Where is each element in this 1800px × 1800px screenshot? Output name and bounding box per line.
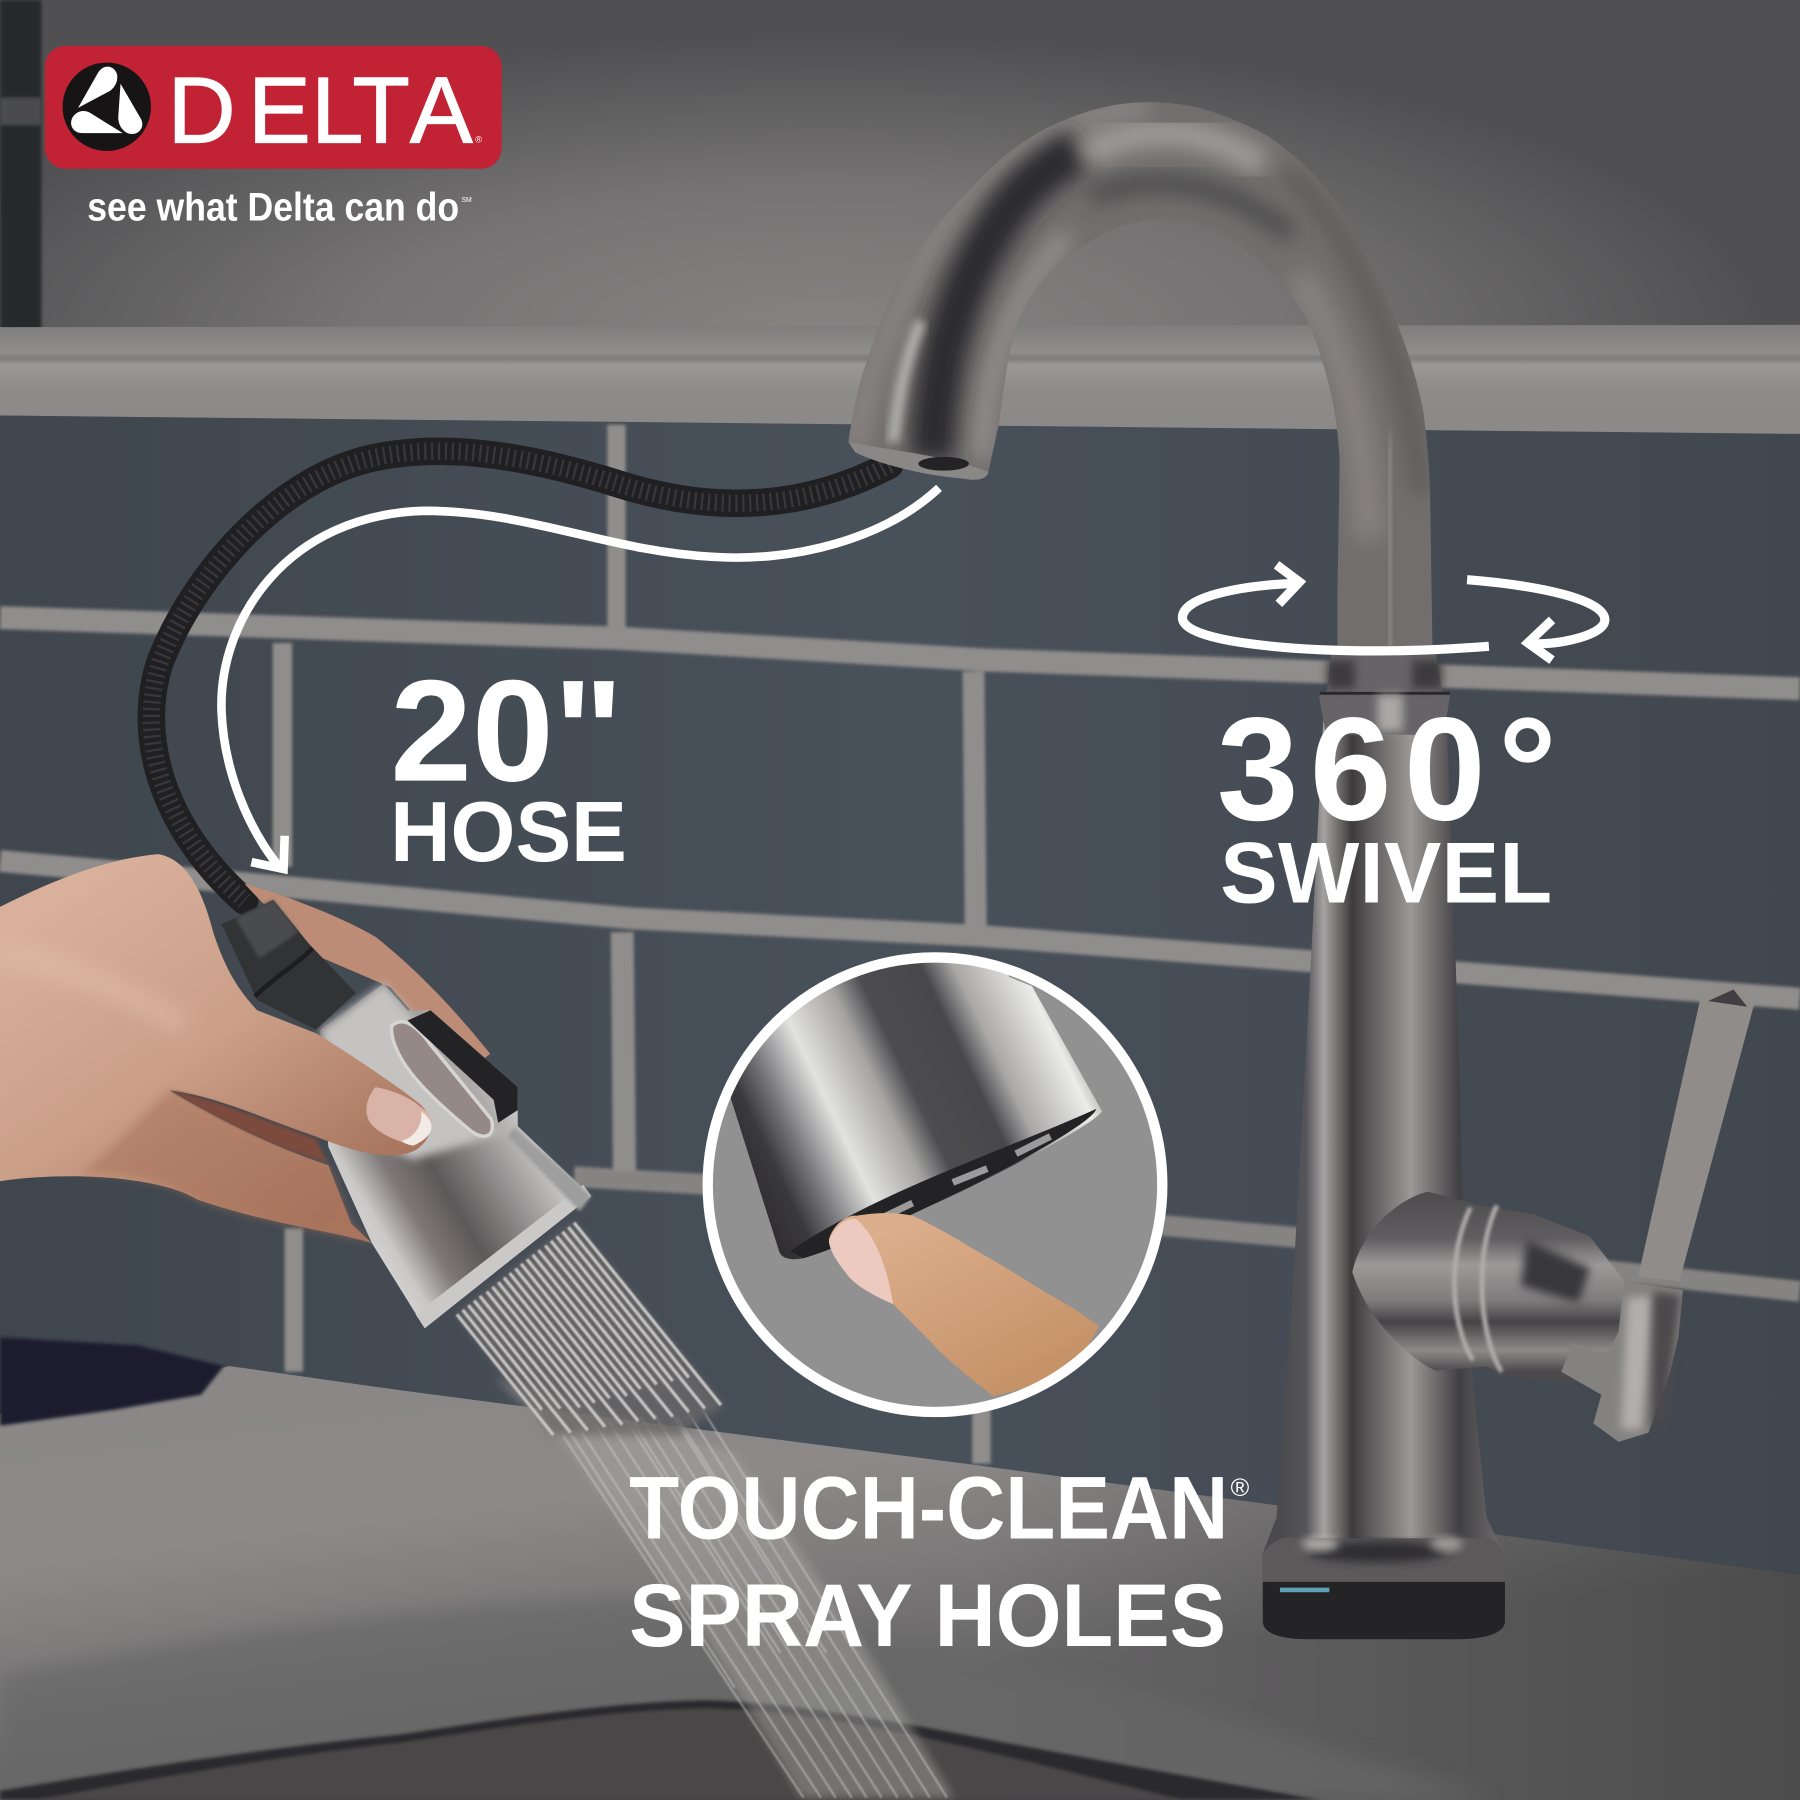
upper fingers behind sprayer: [245, 884, 490, 1073]
sprayer body: [320, 984, 591, 1328]
arrow: swivel rotation: [1182, 565, 1605, 660]
label: 20 inch hose: [390, 650, 627, 879]
swivel collar: [1319, 649, 1450, 735]
hose connector: [222, 900, 356, 1030]
towel: [0, 1337, 224, 1426]
handle hub: [1352, 1192, 1492, 1371]
label: touch-clean spray holes: TOUCH-CLEAN: [629, 1457, 1228, 1557]
handle stem: [1561, 1281, 1683, 1442]
sprayer button: [408, 1010, 518, 1123]
backsplash tiles: [0, 416, 1800, 1607]
spout arch: [848, 102, 1433, 666]
pull-down sprayer: [320, 984, 591, 1328]
logo: Delta: ®: [475, 134, 482, 144]
tagline: see what Delta can do: [87, 184, 459, 229]
base chrome ring: [1263, 1538, 1504, 1586]
hose: [151, 451, 890, 901]
fingertip: [829, 1213, 1099, 1396]
handle lever: [1638, 986, 1754, 1281]
hand holding sprayer: [0, 854, 432, 1243]
handle cone: [1456, 1203, 1624, 1383]
tagline: SM: [461, 197, 472, 204]
label: 360 degree swivel: 360°: [1217, 688, 1557, 852]
logo: Delta: [45, 46, 502, 169]
label: 20 inch hose: 20": [390, 650, 623, 812]
fine lower spray: [494, 1378, 954, 1798]
handle: [1352, 986, 1754, 1442]
fingernail: [829, 1219, 893, 1304]
faucet: [848, 102, 1754, 1639]
reflective oval: [391, 1022, 492, 1136]
spout tip: [848, 442, 988, 480]
icon: Delta triangle mark: [63, 63, 151, 151]
label: 20 inch hose: HOSE: [390, 784, 627, 879]
logo: Delta: DELTA: [168, 57, 473, 162]
wall molding: [0, 325, 1800, 436]
arrow: hose reach: [221, 488, 939, 869]
label: touch-clean spray holes: SPRAY HOLES: [629, 1565, 1226, 1665]
label: touch-clean spray holes: ®: [1231, 1474, 1250, 1502]
label: 360 degree swivel: SWIVEL: [1220, 825, 1552, 921]
fingernail: [366, 1087, 432, 1145]
label: touch-clean spray holes: [629, 1457, 1250, 1665]
spray rods: [457, 1223, 723, 1435]
metal spray head: [730, 962, 1102, 1260]
spray of water: [457, 1223, 954, 1798]
counter top: [0, 1366, 1800, 1800]
faucet body: [1263, 714, 1504, 1584]
sink basin: [0, 1700, 1320, 1800]
touch base: [1263, 1582, 1505, 1639]
inset circle: touch-clean spray holes: [708, 918, 1162, 1412]
